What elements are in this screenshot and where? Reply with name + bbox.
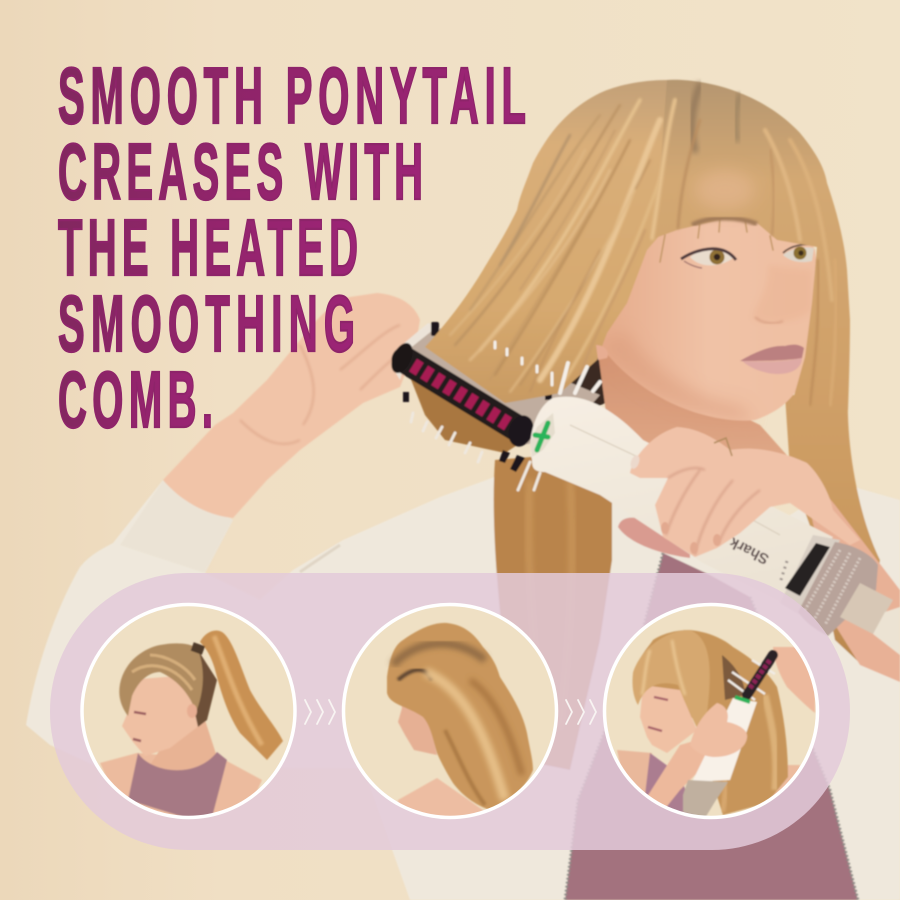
tank top <box>644 753 694 814</box>
white end ring <box>394 323 438 380</box>
brush handle <box>530 397 900 655</box>
chevrons 2 <box>566 700 596 724</box>
green light <box>535 423 548 450</box>
step 3: styling circle <box>604 604 818 830</box>
face <box>600 150 817 421</box>
title: SMOOTHING <box>58 280 355 369</box>
dark pegs <box>403 322 552 472</box>
thumb <box>618 518 690 558</box>
barrel <box>747 655 773 695</box>
eye and lips <box>133 712 146 741</box>
title: COMB. <box>58 356 213 445</box>
title: THE HEATED <box>58 204 358 293</box>
ring <box>714 438 732 456</box>
hair crown <box>119 643 203 716</box>
left arm and hand <box>163 293 420 518</box>
back hair lower <box>494 450 612 770</box>
forehead through fringe <box>695 170 755 210</box>
cord <box>873 607 900 655</box>
lips <box>740 345 804 374</box>
neck <box>152 722 216 770</box>
mini brush handle <box>692 698 757 782</box>
back of hand <box>630 427 860 557</box>
black band <box>785 543 830 596</box>
mini fingers <box>690 703 747 757</box>
control ticks <box>780 561 787 583</box>
dark hair behind brush <box>570 345 612 410</box>
forehead glow <box>690 169 760 221</box>
lower bristles <box>411 413 540 490</box>
translucent steps panel <box>50 573 850 850</box>
silver nozzle <box>840 583 893 634</box>
hair tie <box>191 642 205 655</box>
brush barrel <box>387 340 538 450</box>
right lower hair <box>785 395 880 665</box>
fringe and right hair <box>650 80 850 410</box>
neck <box>597 345 800 545</box>
brand: Shark <box>726 533 772 568</box>
long hair <box>387 623 533 810</box>
forearm behind grip <box>800 463 900 682</box>
shoulder <box>398 778 484 816</box>
main side hair <box>425 80 700 403</box>
title <box>58 52 526 445</box>
right hand <box>629 427 860 557</box>
nose <box>753 265 812 323</box>
pink top <box>565 553 858 900</box>
lips and eye <box>648 697 668 731</box>
silver collar <box>780 535 840 618</box>
sweater <box>26 475 900 900</box>
title: CREASES WITH <box>58 128 423 217</box>
zipper lines <box>565 553 858 900</box>
lower hair under brush <box>408 372 525 453</box>
hair strands <box>450 100 670 392</box>
mini collar <box>683 780 728 818</box>
fringe strands <box>652 85 836 405</box>
chevrons 1 <box>305 700 335 724</box>
wisps <box>660 218 773 262</box>
back hair <box>192 650 217 727</box>
dark underside <box>722 655 745 700</box>
textured grip <box>798 542 878 636</box>
face <box>398 706 438 756</box>
face <box>640 685 697 753</box>
lower face shadow <box>600 330 755 421</box>
shoulder <box>617 750 652 795</box>
eyebrow through fringe <box>692 218 757 225</box>
fringe <box>633 630 710 735</box>
step 2: hair down circle <box>343 604 557 830</box>
shoulders <box>100 752 262 815</box>
title: SMOOTH PONYTAIL <box>58 52 526 141</box>
right shoulder <box>772 764 800 796</box>
forearm and palm <box>648 742 705 806</box>
nails <box>629 454 641 470</box>
ear <box>187 704 197 718</box>
upper hand <box>773 647 815 713</box>
small ear <box>596 345 608 360</box>
ponytail <box>200 630 283 760</box>
brush plate <box>400 325 600 445</box>
step 1: ponytail circle <box>82 604 296 830</box>
upper bristles <box>495 342 600 393</box>
bristles <box>728 660 775 700</box>
head <box>122 675 200 756</box>
tank top <box>128 752 228 816</box>
eyes <box>681 244 818 268</box>
front cap <box>530 413 555 457</box>
back hair <box>633 630 788 815</box>
